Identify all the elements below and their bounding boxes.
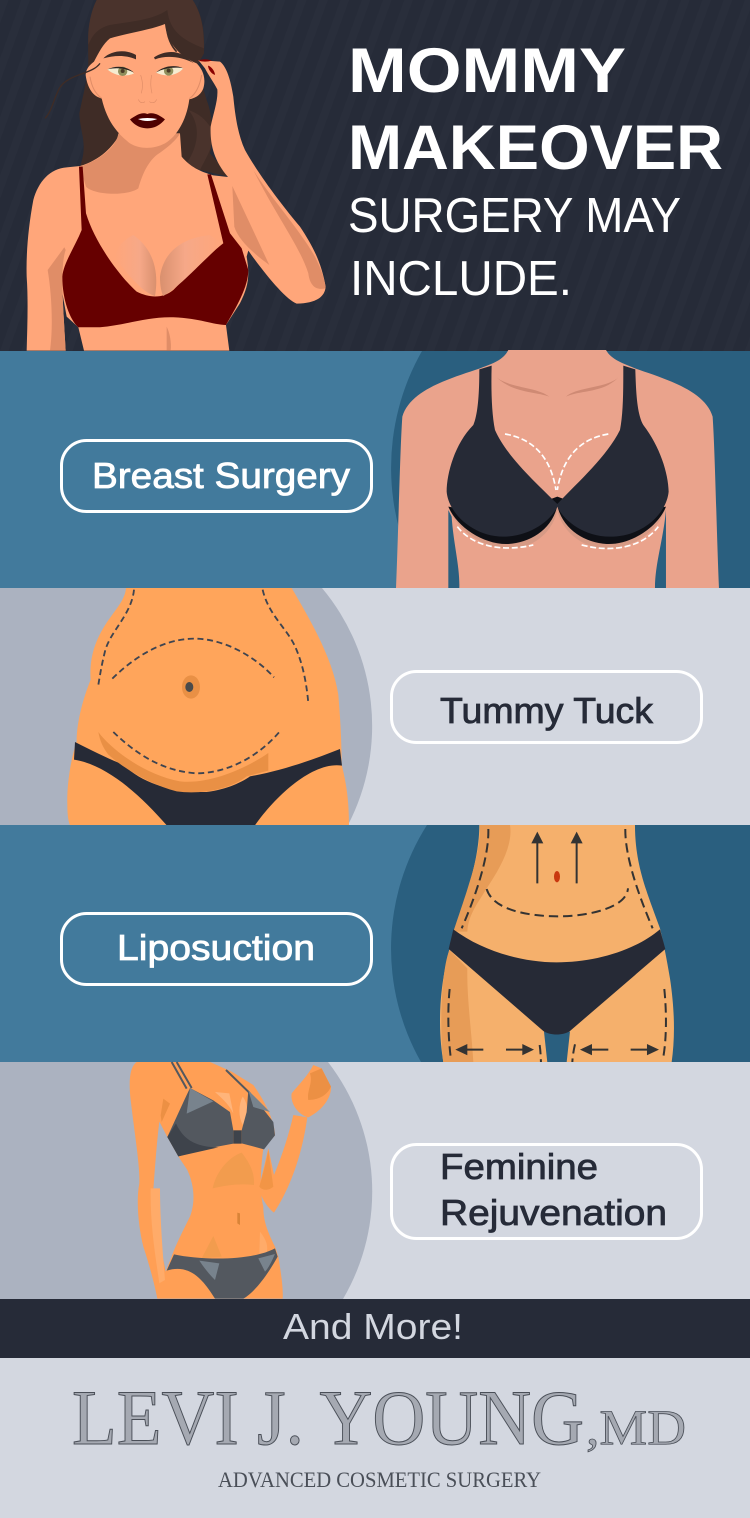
heading: MOMMY [348, 36, 626, 106]
label: liposuction [62, 914, 372, 984]
eyebrows [103, 51, 136, 59]
bra straps [172, 1062, 250, 1093]
label: feminine rejuvenation: Rejuvenation [440, 1192, 667, 1233]
briefs [167, 1248, 278, 1299]
illustration: chest with bra and incision lines [396, 350, 719, 588]
label: feminine rejuvenation [392, 1144, 702, 1238]
illustration: hips with arrows [440, 825, 674, 1062]
heading: SURGERY MAY [348, 189, 681, 243]
panel: breast surgery [0, 350, 750, 588]
label: tummy tuck: Tummy Tuck [440, 690, 654, 731]
bra [62, 167, 248, 327]
panel: header [0, 0, 750, 351]
face [86, 24, 204, 148]
banner: and more: And More! [283, 1306, 463, 1347]
label: feminine rejuvenation: Feminine [440, 1146, 598, 1187]
panel: liposuction [0, 825, 750, 1062]
bra left cup [167, 1088, 233, 1156]
eyes [107, 67, 134, 76]
panel: footer logo [0, 1358, 750, 1518]
label: breast surgery: Breast Surgery [92, 455, 350, 496]
label: tummy tuck [392, 672, 702, 742]
panel: tummy tuck [0, 588, 750, 825]
panel: feminine rejuvenation [0, 1062, 750, 1299]
logo credential: ,MD [586, 1399, 686, 1455]
banner: and more [0, 1299, 750, 1358]
hair top [88, 0, 204, 48]
bra right cup [242, 1090, 275, 1149]
nose [138, 75, 157, 103]
heading: MAKEOVER [348, 113, 723, 183]
label: breast surgery [62, 440, 372, 512]
logo name: LEVI J. YOUNG [72, 1374, 584, 1461]
heading: INCLUDE. [350, 252, 572, 306]
nails [198, 59, 212, 62]
bra center band [233, 1130, 242, 1144]
illustration: abdomen with dashed lines [67, 588, 349, 825]
heading [348, 36, 723, 306]
logo tagline: ADVANCED COSMETIC SURGERY [218, 1467, 541, 1492]
illustration: woman in red bra [27, 0, 326, 351]
label: liposuction: Liposuction [117, 927, 315, 968]
illustration: woman in grey lingerie [130, 1062, 331, 1299]
lips [130, 113, 165, 128]
loose hair strand [45, 63, 100, 118]
